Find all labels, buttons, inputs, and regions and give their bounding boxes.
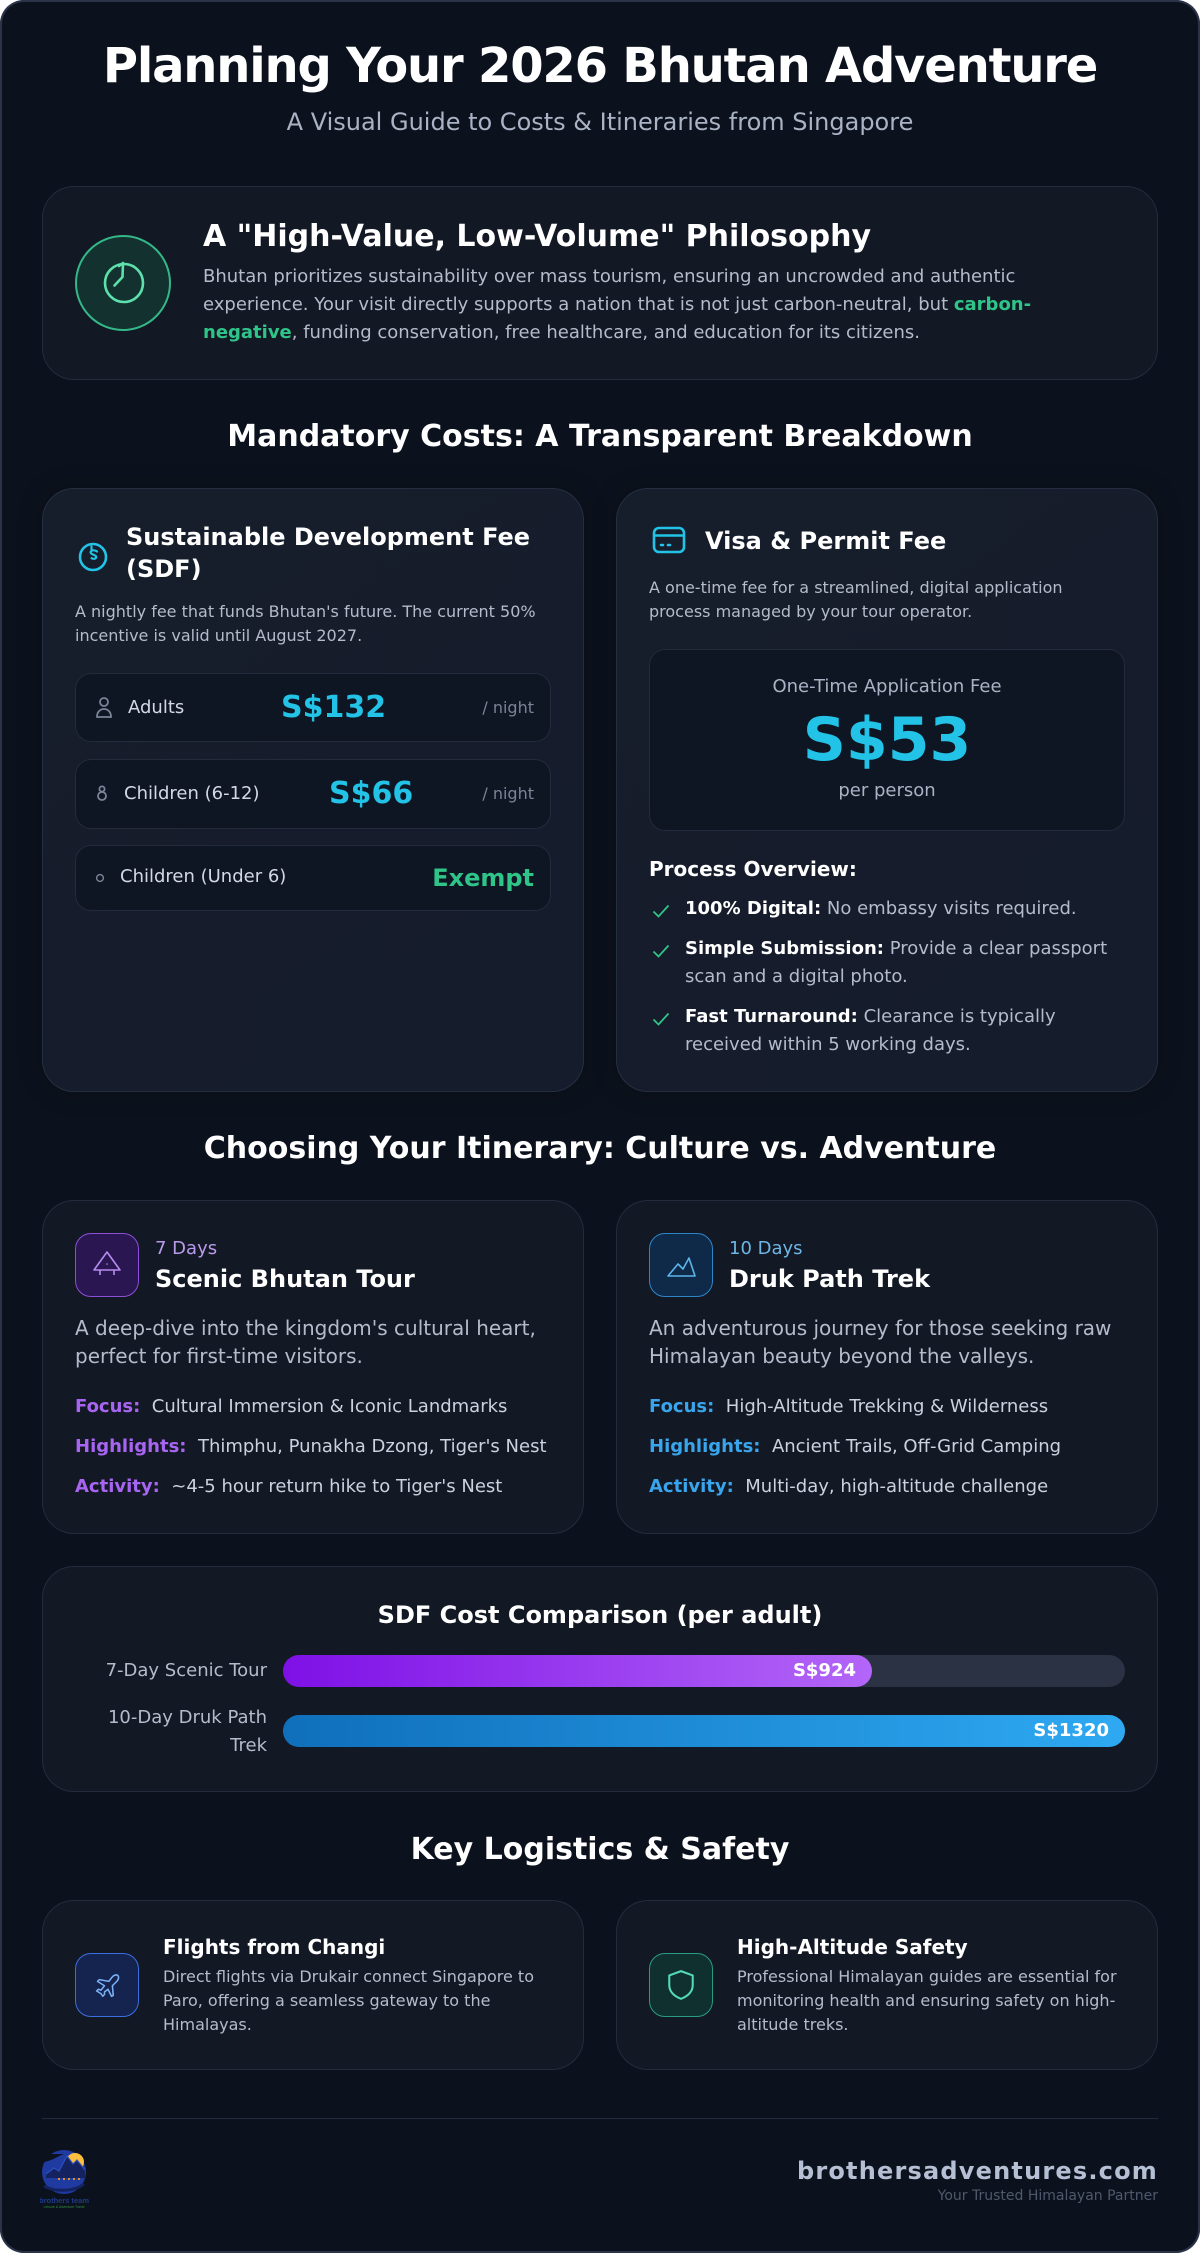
highlights: Highlights: Thimphu, Punakha Dzong, Tiger's Nest — [75, 1436, 546, 1457]
text: Fast Turnaround: Clearance is typically — [685, 1006, 1056, 1027]
text — [685, 938, 1107, 987]
title: Planning Your 2026 Bhutan Adventure — [103, 38, 1097, 94]
activity: Activity: ~4-5 hour return hike to Tiger's Nest — [75, 1476, 502, 1497]
bar fill: S$1320 — [283, 1715, 1125, 1747]
text: scan and a digital photo. — [685, 966, 908, 987]
description: incentive is valid until August 2027. — [75, 626, 362, 645]
process list — [652, 898, 1107, 1055]
text: Simple Submission: Provide a clear passport — [685, 938, 1107, 959]
text: received within 5 working days. — [685, 1034, 971, 1055]
icon: check — [652, 904, 670, 918]
panel: druk path trek — [616, 1200, 1158, 1534]
description: An adventurous journey for those seeking raw — [649, 1316, 1111, 1340]
heading: Visa & Permit Fee — [705, 527, 946, 555]
value: S$1320 — [1033, 1720, 1109, 1741]
subtitle: A Visual Guide to Costs & Itineraries from Singapore — [287, 108, 913, 136]
exempt value: Exempt — [432, 864, 534, 892]
bar label: druk — [108, 1707, 267, 1756]
fee amount: S$53 — [803, 705, 971, 775]
value: S$924 — [793, 1660, 856, 1681]
description: Professional Himalayan guides are essential for — [737, 1967, 1117, 1986]
tour name: Scenic Bhutan Tour — [155, 1265, 415, 1293]
duration: 7 Days — [155, 1238, 217, 1259]
price: S$66 — [329, 776, 413, 811]
tour name: Druk Path Trek — [729, 1265, 930, 1293]
focus: Focus: Cultural Immersion & Iconic Landmarks — [75, 1396, 507, 1417]
footer divider — [42, 2118, 1158, 2119]
bar fill: S$924 — [283, 1655, 872, 1687]
text: 100% Digital: No embassy visits required. — [685, 898, 1077, 919]
icon: mountain — [649, 1233, 713, 1297]
label: Adults — [128, 697, 184, 718]
fee unit: per person — [838, 780, 936, 801]
icon: child — [97, 786, 107, 801]
icon: leaf clock — [75, 235, 171, 331]
icon: card — [652, 526, 686, 554]
icon: small circle — [96, 874, 104, 882]
row: children under 6 — [75, 845, 551, 911]
label: Children (6-12) — [124, 783, 260, 804]
process heading: Process Overview: — [649, 857, 857, 881]
website: brothersadventures.com — [797, 2157, 1158, 2185]
icon: temple triangle — [75, 1233, 139, 1297]
unit: / night — [482, 698, 534, 717]
heading: Sustainable Development Fee — [126, 523, 530, 551]
item: submission — [652, 938, 1107, 987]
unit: / night — [482, 784, 534, 803]
logo: Leisure & Adventure Travel — [44, 2205, 85, 2209]
chart title: SDF Cost Comparison (per adult) — [378, 1601, 822, 1629]
details — [75, 1396, 546, 1497]
heading: itinerary: Choosing Your Itinerary: Culture vs. Adventure — [204, 1131, 996, 1166]
icon: shield — [649, 1953, 713, 2017]
bar label: scenic: 7-Day Scenic Tour — [106, 1660, 267, 1681]
description — [163, 1967, 534, 2034]
description: Himalayan beauty beyond the valleys. — [649, 1344, 1034, 1368]
description: altitude treks. — [737, 2015, 848, 2034]
row: children 6-12 — [75, 759, 551, 829]
description — [75, 602, 536, 645]
panel: safety — [616, 1900, 1158, 2070]
row: adults — [75, 673, 551, 742]
description: process managed by your tour operator. — [649, 602, 972, 621]
panel: philosophy — [42, 186, 1158, 380]
details — [649, 1396, 1061, 1497]
title: Flights from Changi — [163, 1935, 385, 1959]
description: Paro, offering a seamless gateway to the — [163, 1991, 490, 2010]
logo: brothers team — [40, 2196, 89, 2205]
panel: visa fee — [616, 488, 1158, 1092]
logo — [40, 2150, 89, 2209]
icon: check — [652, 944, 670, 958]
icon: dollar coin — [78, 542, 108, 572]
fee label: One-Time Application Fee — [772, 676, 1002, 697]
text — [685, 1006, 1056, 1055]
item: digital — [652, 898, 1077, 919]
label: Children (Under 6) — [120, 866, 286, 887]
panel: SDF fee — [42, 488, 584, 1092]
heading — [126, 523, 530, 583]
body text: negative, funding conservation, free healthcare, and education for its citizens. — [203, 322, 920, 343]
description: A one-time fee for a streamlined, digital application — [649, 578, 1063, 597]
heading: logistics: Key Logistics & Safety — [411, 1832, 789, 1867]
panel: cost comparison chart — [42, 1566, 1158, 1792]
icon: plane — [75, 1953, 139, 2017]
description — [649, 578, 1063, 621]
bar label: druk: Trek — [230, 1735, 267, 1756]
fee box — [649, 649, 1125, 831]
description: A nightly fee that funds Bhutan's future. The current 50% — [75, 602, 536, 621]
bar label: druk: 10-Day Druk Path — [108, 1707, 267, 1728]
tagline: Your Trusted Himalayan Partner — [938, 2188, 1158, 2204]
bar: druk — [283, 1715, 1125, 1747]
description — [737, 1967, 1117, 2034]
duration: 10 Days — [729, 1238, 803, 1259]
body text: Bhutan prioritizes sustainability over mass tourism, ensuring an uncrowded and authentic — [203, 266, 1015, 287]
description — [75, 1316, 536, 1368]
body text: experience. Your visit directly supports a nation that is not just carbon-neutral, but carbon- — [203, 294, 1031, 315]
highlights: Highlights: Ancient Trails, Off-Grid Camping — [649, 1436, 1061, 1457]
body text — [203, 266, 1031, 343]
heading: mandatory costs: Mandatory Costs: A Transparent Breakdown — [227, 419, 973, 454]
activity: Activity: Multi-day, high-altitude challenge — [649, 1476, 1048, 1497]
heading: (SDF) — [126, 555, 202, 583]
price: S$132 — [281, 690, 386, 725]
description — [649, 1316, 1111, 1368]
focus: Focus: High-Altitude Trekking & Wilderness — [649, 1396, 1048, 1417]
icon: person — [96, 697, 112, 718]
item: turnaround — [652, 1006, 1056, 1055]
bar: scenic — [283, 1655, 1125, 1687]
description: Direct flights via Drukair connect Singapore to — [163, 1967, 534, 1986]
panel: flights — [42, 1900, 584, 2070]
icon: check — [652, 1012, 670, 1026]
description: A deep-dive into the kingdom's cultural heart, — [75, 1316, 536, 1340]
heading: A "High-Value, Low-Volume" Philosophy — [203, 219, 871, 254]
panel: scenic tour — [42, 1200, 584, 1534]
description: Himalayas. — [163, 2015, 252, 2034]
description: monitoring health and ensuring safety on high- — [737, 1991, 1115, 2010]
description: perfect for first-time visitors. — [75, 1344, 363, 1368]
title: High-Altitude Safety — [737, 1935, 968, 1959]
